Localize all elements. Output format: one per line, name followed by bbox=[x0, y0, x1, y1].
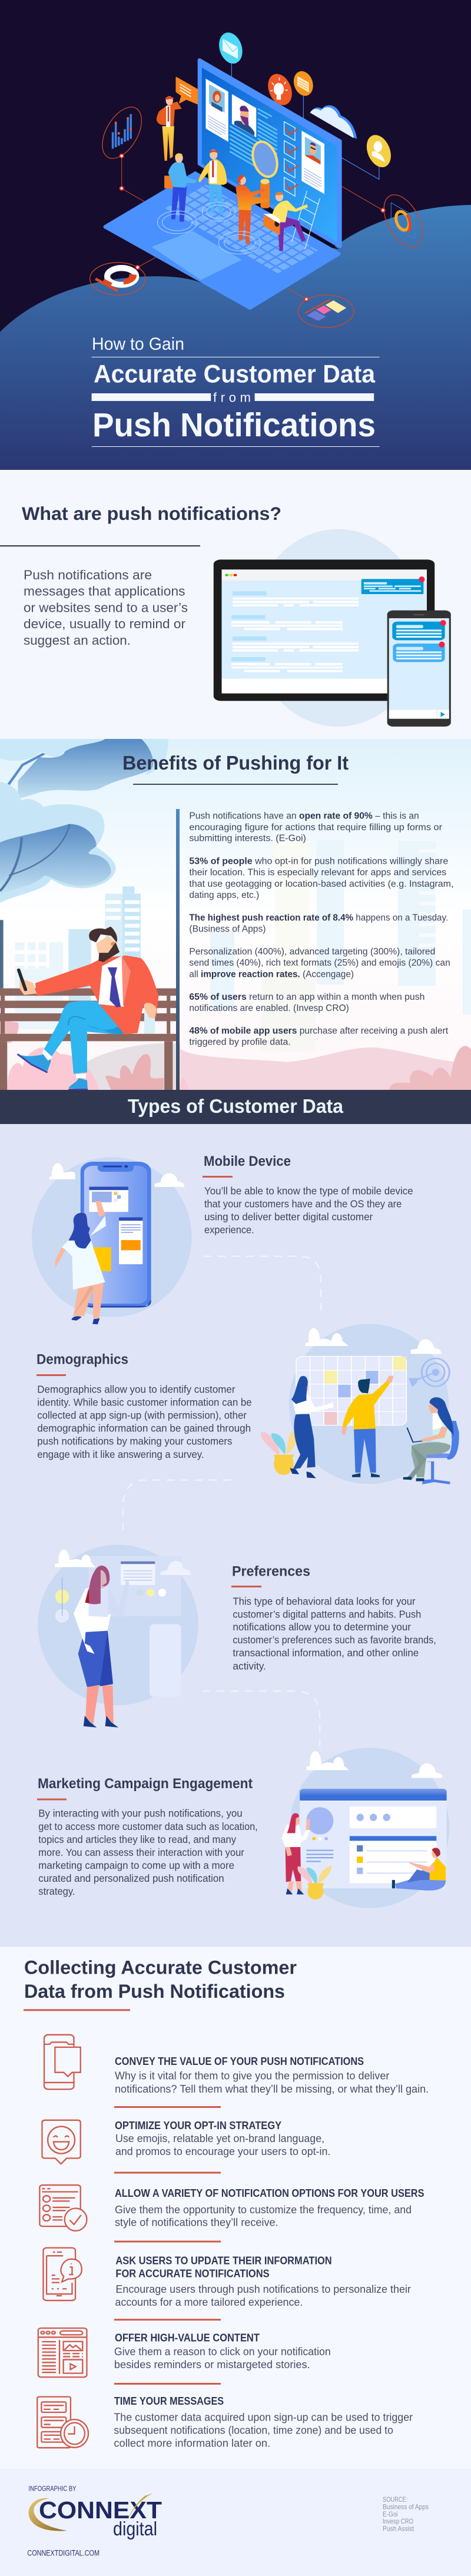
heading rule bbox=[0, 545, 200, 546]
man reaching bbox=[341, 1376, 393, 1477]
tip two bbox=[115, 2119, 330, 2157]
body copy bbox=[38, 1808, 258, 1897]
body copy: topics and articles they like to read, and many bbox=[38, 1834, 236, 1845]
panel: what are push notifications bbox=[0, 470, 471, 739]
connext digital logo: CONNEXT bbox=[39, 2497, 162, 2524]
man head bbox=[89, 927, 120, 962]
tip six: The customer data acquired upon sign-up can be used to trigger bbox=[114, 2411, 413, 2423]
donut bubble right bbox=[376, 188, 430, 253]
text: marketing campaign engagement bbox=[37, 1776, 258, 1897]
accent rule bbox=[37, 1374, 66, 1376]
icon: schedule clock bbox=[37, 2397, 88, 2448]
definition text: or websites send to a user’s bbox=[24, 600, 188, 615]
laptop keyboard bbox=[164, 184, 319, 273]
title: Preferences bbox=[232, 1563, 310, 1579]
benefits vertical bar bbox=[176, 809, 180, 1090]
body copy bbox=[204, 1185, 413, 1236]
body copy: notifications allow you to determine your bbox=[233, 1621, 411, 1633]
woman bbox=[55, 1201, 106, 1324]
person in orange bbox=[236, 175, 269, 244]
laptop screen bbox=[195, 60, 340, 249]
icon: phone with message bbox=[44, 2035, 81, 2089]
benefits text: all improve reaction rates. (Accengage) bbox=[189, 969, 354, 979]
title bar right bbox=[255, 393, 374, 401]
footer sources: E-Goi bbox=[383, 2510, 398, 2518]
benefits text: submitting interests. (E-Goi) bbox=[189, 834, 306, 844]
tip one: notifications? Tell them what they’ll be missing, or what they’ll gain. bbox=[115, 2083, 429, 2095]
plant bbox=[261, 1431, 297, 1475]
calendar bbox=[296, 1357, 406, 1425]
heading: what are push notifications: What are push notifications? bbox=[22, 503, 281, 524]
hero illustration bbox=[0, 29, 471, 470]
man hands and phone bbox=[19, 970, 157, 1019]
tip four bbox=[115, 2254, 411, 2308]
text: mobile device bbox=[203, 1153, 413, 1236]
icon: cloud bbox=[310, 105, 357, 139]
benefits text: Personalization (400%), advanced targeting (300%), tailored bbox=[189, 947, 435, 957]
chart bubble left bbox=[94, 101, 150, 165]
benefits text: encouraging figure for actions that require filling up forms or bbox=[189, 823, 442, 833]
magnifier bbox=[248, 138, 281, 208]
body copy: customer’s digital patterns and habits. Push bbox=[233, 1608, 421, 1620]
icon: bulb bbox=[264, 70, 296, 109]
body copy bbox=[37, 1384, 252, 1460]
phone notification one bbox=[392, 620, 446, 640]
profile card middle bbox=[232, 94, 256, 137]
tip three bbox=[115, 2187, 424, 2229]
phone body bbox=[81, 1162, 151, 1308]
profile card right bbox=[301, 131, 324, 194]
icon stems bbox=[231, 62, 379, 180]
icon: user bbox=[362, 131, 396, 171]
tree upper canopy bbox=[0, 739, 168, 799]
body copy: push notifications by making your customers bbox=[37, 1435, 233, 1447]
footer sources: Business of Apps bbox=[383, 2502, 429, 2511]
park illustration bbox=[0, 739, 471, 1090]
illustration: mobile device bbox=[32, 1157, 192, 1324]
benefits text: 53% of people who opt-in for push notifications willingly share bbox=[189, 856, 448, 866]
tablet bbox=[214, 559, 434, 701]
tree lower canopy bbox=[0, 782, 116, 989]
accent rule bbox=[203, 1176, 233, 1178]
title: Demographics bbox=[37, 1352, 128, 1368]
body copy: By interacting with your push notifications, you bbox=[38, 1808, 243, 1819]
body copy: get to access more customer data such as location, bbox=[38, 1821, 258, 1832]
seated woman with laptop bbox=[403, 1397, 459, 1484]
icon: phone with info bbox=[43, 2248, 82, 2300]
backdrop circle bbox=[290, 1748, 449, 1908]
checklist bbox=[284, 122, 298, 196]
tip five bbox=[114, 2331, 331, 2371]
man shirt and tie bbox=[98, 956, 131, 1007]
laptop trackpad bbox=[152, 231, 242, 280]
tip one: CONVEY THE VALUE OF YOUR PUSH NOTIFICATIONS bbox=[115, 2055, 364, 2067]
benefits text: notifications are enabled. (Invesp CRO) bbox=[189, 1003, 349, 1013]
title bar left bbox=[92, 393, 211, 401]
tip six: subsequent notifications (location, time zone) and be used to bbox=[114, 2424, 393, 2436]
browser window bbox=[300, 1789, 447, 1888]
tip five: OFFER HIGH-VALUE CONTENT bbox=[115, 2331, 260, 2343]
tip six: TIME YOUR MESSAGES bbox=[114, 2395, 224, 2407]
phone notification two bbox=[393, 642, 445, 662]
title intro: How to Gain bbox=[92, 334, 184, 354]
body copy: curated and personalized push notification bbox=[38, 1872, 224, 1884]
connext digital logo bbox=[29, 2493, 162, 2539]
benefits rule bbox=[133, 784, 338, 785]
body copy: using to deliver better digital customer bbox=[204, 1211, 373, 1222]
bench bbox=[0, 989, 177, 1090]
benefits text bbox=[189, 811, 453, 1047]
person on phone bbox=[157, 96, 182, 161]
body copy: activity. bbox=[233, 1660, 266, 1672]
definition text: messages that applications bbox=[24, 584, 185, 599]
icon: content layout bbox=[38, 2328, 87, 2377]
tip six: collect more information later on. bbox=[114, 2437, 270, 2449]
plant bbox=[298, 1865, 332, 1899]
hero title bbox=[92, 334, 380, 447]
body copy: more. You can assess their interaction with your bbox=[38, 1846, 244, 1858]
body copy: transactional information, and other online bbox=[233, 1647, 419, 1659]
body copy: You’ll be able to know the type of mobile device bbox=[204, 1185, 413, 1196]
body copy: engage with it like answering a survey. bbox=[37, 1448, 204, 1460]
text: demographics bbox=[37, 1352, 252, 1460]
tablet article lines bbox=[231, 598, 359, 672]
footer sources: Invesp CRO bbox=[383, 2517, 413, 2525]
benefits text: their location. This is especially relevant for apps and services bbox=[189, 868, 446, 878]
accent rule bbox=[231, 1586, 261, 1587]
body copy: customer’s preferences such as favorite brands, bbox=[233, 1634, 436, 1646]
body copy: marketing campaign to come up with a more bbox=[38, 1859, 234, 1871]
tip three: ALLOW A VARIETY OF NOTIFICATION OPTIONS FOR YOUR USERS bbox=[115, 2187, 424, 2199]
benefits text: dating apps, etc.) bbox=[189, 890, 259, 900]
body copy bbox=[233, 1595, 436, 1672]
seated man bbox=[392, 1848, 446, 1891]
tip rule four bbox=[114, 2319, 221, 2320]
glass cup bbox=[144, 1009, 155, 1033]
panel: types band bbox=[0, 1090, 471, 1124]
tip five: besides reminders or mistargeted stories. bbox=[114, 2359, 310, 2371]
tablet notification bbox=[361, 576, 424, 594]
heading: types of customer data: Types of Customer Data bbox=[128, 1095, 344, 1117]
footer website: CONNEXTDIGITAL.COM bbox=[27, 2548, 99, 2558]
body copy: identity. While basic customer information can be bbox=[37, 1396, 252, 1408]
tip two: OPTIMIZE YOUR OPT-IN STRATEGY bbox=[115, 2119, 282, 2131]
backdrop circle bbox=[38, 1545, 198, 1705]
tip rule two bbox=[114, 2171, 221, 2174]
illustration: demographics bbox=[261, 1324, 459, 1484]
woman bbox=[74, 1566, 129, 1728]
ladder bbox=[292, 191, 320, 249]
benefits text: Push notifications have an open rate of 90% – this is an bbox=[189, 811, 419, 821]
speech bubble icon bbox=[176, 78, 197, 104]
definition text: device, usually to remind or bbox=[24, 616, 185, 631]
glowing nodes bbox=[120, 154, 385, 301]
donut bubble left bbox=[90, 263, 145, 295]
body copy: that your customers have and the OS they are bbox=[204, 1198, 402, 1210]
benefits text: 65% of users return to an app within a month when push bbox=[189, 992, 424, 1002]
target bbox=[409, 1358, 449, 1387]
title line two: Push Notifications bbox=[92, 406, 376, 444]
icon: smiling message bbox=[42, 2120, 81, 2164]
title: Mobile Device bbox=[204, 1153, 291, 1169]
body copy: experience. bbox=[204, 1224, 254, 1236]
backdrop circle bbox=[251, 529, 424, 727]
tip rule three bbox=[114, 2241, 221, 2242]
benefits text: 48% of mobile app users purchase after receiving a push alert bbox=[189, 1026, 449, 1036]
skyline bbox=[15, 841, 471, 1029]
panel: benefits bbox=[0, 739, 471, 1090]
body copy: This type of behavioral data looks for your bbox=[233, 1595, 416, 1607]
person in yellow bbox=[198, 150, 227, 215]
tip four: ASK USERS TO UPDATE THEIR INFORMATION bbox=[115, 2254, 332, 2267]
illustration: preferences bbox=[38, 1545, 198, 1728]
tip three: Give them the opportunity to customize the frequency, time, and bbox=[115, 2204, 412, 2216]
devices illustration bbox=[214, 529, 451, 727]
text: preferences bbox=[231, 1563, 436, 1672]
clouds bbox=[306, 1751, 443, 1778]
backdrop circle bbox=[289, 1324, 449, 1484]
clouds bbox=[49, 1163, 185, 1187]
backdrop circle bbox=[32, 1157, 192, 1317]
tip one: Why is it vital for them to give you the permission to deliver bbox=[115, 2070, 389, 2082]
interface panels bbox=[55, 1556, 181, 1697]
title line one: Accurate Customer Data bbox=[94, 360, 376, 389]
panel: collecting accurate customer data bbox=[0, 1947, 471, 2469]
tip one bbox=[115, 2055, 429, 2095]
benefits text: triggered by profile data. bbox=[189, 1037, 291, 1047]
footer sources: Push Assist bbox=[383, 2525, 414, 2533]
woman standing bbox=[281, 1813, 310, 1894]
connext digital logo: digital bbox=[113, 2518, 157, 2539]
panel: types of customer data bbox=[0, 1124, 471, 1947]
tip two: and promos to encourage your users to opt-in. bbox=[115, 2146, 330, 2157]
man on bench bbox=[18, 927, 158, 1090]
illustration: marketing campaign bbox=[281, 1748, 449, 1908]
heading: collecting accurate customer data: Collecting Accurate Customer bbox=[24, 1957, 297, 1978]
footer sources: SOURCE: bbox=[383, 2495, 407, 2504]
icon: checklist bbox=[39, 2185, 87, 2231]
tiles bubble bottom bbox=[298, 295, 354, 327]
screen cards bbox=[89, 1186, 142, 1271]
footer credit label: INFOGRAPHIC BY bbox=[28, 2485, 77, 2493]
woman standing bbox=[290, 1376, 333, 1478]
tip four: Encourage users through push notifications to personalize their bbox=[115, 2283, 411, 2295]
clouds bbox=[55, 1550, 191, 1575]
hero background bbox=[0, 0, 471, 470]
tip two: Use emojis, relatable yet on-brand language, bbox=[115, 2133, 324, 2144]
definition text: Push notifications are bbox=[24, 568, 152, 582]
heading: collecting accurate customer data bbox=[24, 1957, 297, 2002]
tip five: Give them a reason to click on your notification bbox=[114, 2346, 331, 2358]
pink hills bbox=[0, 1020, 471, 1090]
tip three: style of notifications they’ll receive. bbox=[115, 2217, 278, 2229]
accent rule bbox=[37, 1798, 67, 1801]
person in blue bbox=[164, 153, 197, 222]
tip rule five bbox=[114, 2383, 221, 2385]
connector lines bbox=[122, 156, 383, 299]
definition text: suggest an action. bbox=[24, 633, 131, 648]
benefits text: send times (40%), rich text formats (25%) and emojis (20%) can bbox=[189, 958, 450, 968]
body copy: strategy. bbox=[38, 1885, 75, 1897]
icon: mail bbox=[215, 29, 246, 67]
footer sources bbox=[383, 2495, 429, 2533]
seated person with folder bbox=[263, 193, 308, 251]
tip four: accounts for a more tailored experience. bbox=[115, 2296, 303, 2308]
dashed connectors bbox=[123, 1256, 321, 1749]
body copy: collected at app sign-up (with permission), other bbox=[37, 1410, 247, 1421]
panel: footer bbox=[0, 2469, 471, 2576]
profile card left bbox=[205, 79, 228, 142]
title: Marketing Campaign Engagement bbox=[38, 1776, 253, 1792]
clouds bbox=[305, 1328, 442, 1354]
tip six bbox=[114, 2395, 413, 2449]
body copy: demographic information can be gained through bbox=[37, 1422, 251, 1434]
benefits text: that use geotagging or location-based activities (e.g. Instagram, bbox=[189, 879, 453, 889]
floor rings bbox=[157, 202, 261, 254]
heading: benefits: Benefits of Pushing for It bbox=[122, 752, 349, 774]
definition text bbox=[24, 568, 188, 648]
heading accent rule bbox=[24, 2009, 130, 2011]
laptop base bbox=[105, 173, 339, 308]
tip rule one bbox=[114, 2106, 221, 2108]
title from: from bbox=[213, 390, 251, 405]
hero wave bbox=[0, 205, 471, 470]
phone bbox=[387, 611, 451, 727]
icon: briefcase bbox=[291, 69, 316, 98]
benefits text: The highest push reaction rate of 8.4% happens on a Tuesday. bbox=[189, 913, 448, 923]
title rule bottom bbox=[92, 446, 380, 447]
body copy: Demographics allow you to identify customer bbox=[37, 1384, 236, 1395]
man legs bbox=[44, 1001, 132, 1074]
tip four: FOR ACCURATE NOTIFICATIONS bbox=[115, 2267, 270, 2280]
heading: collecting accurate customer data: Data from Push Notifications bbox=[24, 1981, 285, 2002]
screen text lines bbox=[230, 109, 277, 166]
benefits text: (Business of Apps) bbox=[189, 924, 266, 934]
man shoes bbox=[18, 1049, 88, 1090]
man jacket bbox=[35, 956, 158, 1035]
